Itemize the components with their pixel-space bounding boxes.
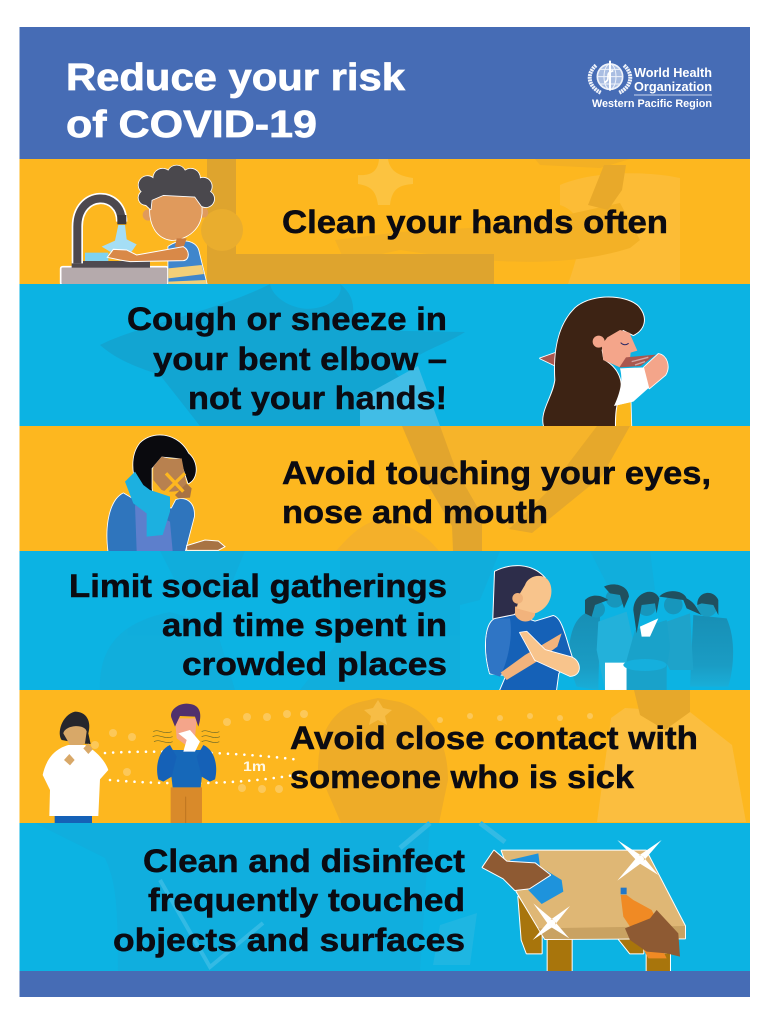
distance marker: 1m: 1m	[243, 758, 266, 774]
hand with sponge	[483, 851, 550, 890]
cross on face	[165, 473, 185, 493]
text: Avoid touching your eyes,	[282, 455, 711, 491]
text	[113, 843, 465, 958]
hair	[139, 166, 214, 209]
text: your bent elbow –	[153, 341, 447, 377]
text	[69, 568, 447, 682]
background ghost: crowd	[100, 551, 655, 690]
torso	[614, 402, 631, 426]
text: someone who is sick	[290, 759, 634, 795]
panel: avoid touching face	[20, 426, 750, 551]
tap	[77, 199, 122, 263]
panel: clean and disinfect	[20, 823, 750, 972]
back elbow	[540, 353, 556, 366]
logo: WHO Western Pacific Region	[590, 61, 712, 110]
logo: WHO Western Pacific Region: Organization	[634, 80, 712, 94]
hand	[175, 483, 192, 498]
icon: sick man sneezing	[153, 704, 220, 823]
icon: girl coughing into elbow	[540, 297, 668, 426]
icon: table being cleaned	[483, 840, 685, 972]
text: not your hands!	[188, 380, 447, 416]
face	[153, 457, 187, 492]
background ghost: figures	[318, 690, 746, 823]
background ghost: elbow	[100, 284, 465, 426]
text	[282, 455, 711, 530]
title	[66, 57, 406, 146]
panel: limit social gatherings	[20, 551, 750, 691]
forearm	[644, 354, 668, 388]
icon: woman in white	[43, 712, 108, 823]
person 1	[568, 613, 600, 690]
title: Reduce your risk	[66, 57, 406, 99]
crossed arms	[501, 633, 562, 680]
faces	[606, 589, 624, 608]
text: objects and surfaces	[113, 922, 465, 958]
heading: Clean your hands often	[282, 204, 668, 240]
background ghost: hands under tap	[201, 159, 680, 284]
text	[127, 301, 447, 416]
text	[290, 720, 698, 795]
text: Limit social gatherings	[69, 568, 447, 604]
faint droplets	[91, 710, 593, 793]
icon: boy washing hands at sink	[61, 166, 214, 285]
hand with bottle	[625, 910, 680, 957]
icon: WHO emblem	[590, 61, 630, 93]
footer band	[20, 971, 750, 997]
text: frequently touched	[148, 882, 465, 918]
logo: WHO Western Pacific Region: World Health	[634, 66, 712, 80]
hair	[493, 566, 545, 618]
panel: cough or sneeze	[20, 284, 750, 426]
panel: clean hands	[20, 159, 750, 285]
sink	[61, 253, 168, 285]
sparkles	[533, 840, 662, 940]
icon: girl with crossed-out face	[107, 435, 225, 551]
resting hand	[187, 540, 225, 550]
title: of COVID-19	[66, 104, 317, 146]
text: crowded places	[182, 646, 447, 682]
spray bottle	[621, 895, 667, 958]
hair	[133, 435, 196, 512]
text: Avoid close contact with	[290, 720, 698, 756]
hair	[585, 584, 718, 633]
face	[602, 330, 637, 367]
boy body	[168, 241, 207, 284]
text: and time spent in	[162, 607, 447, 643]
background ghost: light reflections	[35, 823, 505, 971]
table top	[502, 851, 685, 939]
arm and hands	[107, 247, 188, 262]
text: nose and mouth	[282, 494, 548, 530]
neck and face	[515, 605, 535, 621]
text: Clean and disinfect	[143, 843, 465, 879]
text: Cough or sneeze in	[127, 301, 447, 337]
person 4	[660, 613, 693, 670]
head	[143, 209, 154, 221]
hair	[543, 297, 644, 426]
panel: avoid close contact	[20, 690, 750, 823]
sleeve	[614, 367, 649, 406]
person 2	[597, 612, 637, 690]
water	[102, 225, 137, 252]
logo: WHO Western Pacific Region: Western Pacific Region	[592, 98, 712, 110]
jacket	[107, 493, 194, 551]
sponge	[510, 853, 563, 904]
person 5	[690, 615, 733, 687]
icon: crowd	[568, 584, 733, 690]
panel: header	[20, 27, 750, 159]
icon: girl with crossed arms	[486, 566, 579, 691]
body	[486, 615, 572, 691]
background ghost: figure	[336, 426, 630, 551]
distance marker: 1m	[105, 752, 300, 783]
scarf	[125, 472, 170, 537]
table legs	[518, 897, 542, 953]
person 3	[627, 620, 670, 690]
